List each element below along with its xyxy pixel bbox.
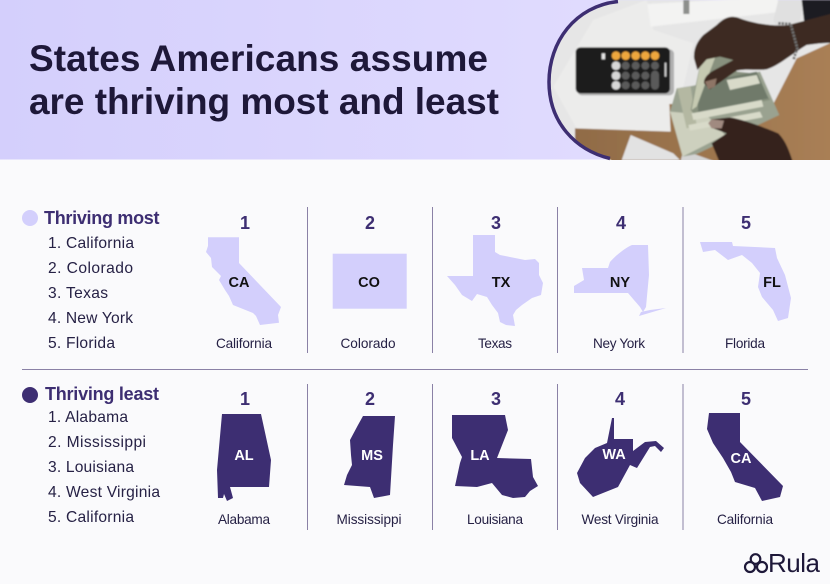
card: least 5 California: CA — [731, 451, 752, 467]
legend dot: dark — [22, 387, 38, 403]
card: most 1 California — [206, 213, 281, 351]
list: top five: 2. Colorado — [48, 260, 133, 277]
heading: thriving most: Thriving most — [44, 208, 160, 228]
card: least 4 West Virginia: 4 — [615, 389, 625, 409]
card: least 4 West Virginia: WA — [602, 447, 626, 463]
list: top five: 4. New York — [48, 310, 133, 327]
card: most 4 New York: Ney York — [593, 336, 645, 351]
photo frame arc — [549, 2, 618, 158]
card: most 3 Texas: Texas — [478, 336, 512, 351]
card: least 3 Louisiana: 3 — [491, 389, 501, 409]
card: least 3 Louisiana — [452, 389, 538, 527]
list: top five: 1. California — [48, 235, 134, 252]
card: most 5 Florida: Florida — [725, 336, 765, 351]
card: most 4 New York — [574, 213, 666, 351]
list: bottom five: 2. Mississippi — [48, 434, 146, 451]
icon: logo loops — [745, 554, 767, 572]
title: States Americans assume — [29, 38, 488, 79]
list: bottom five: 4. West Virginia — [48, 484, 160, 501]
panel: thriving most legend — [22, 208, 160, 352]
list: top five: 5. Florida — [48, 335, 115, 352]
card: most 2 Colorado: 2 — [365, 213, 375, 233]
card: least 2 Mississippi — [336, 389, 402, 527]
card: most 4 New York: 4 — [616, 213, 626, 233]
card: most 1 California: California — [216, 336, 272, 351]
map: Alabama — [217, 414, 271, 501]
card: least 2 Mississippi: Mississippi — [336, 512, 402, 527]
card: least 3 Louisiana: LA — [470, 448, 490, 464]
map: Louisiana — [452, 415, 538, 498]
list: top five: 3. Texas — [48, 285, 108, 302]
list: top five — [48, 235, 134, 352]
card: most 4 New York: NY — [610, 275, 630, 291]
title — [29, 38, 499, 122]
heading: thriving least: Thriving least — [45, 384, 159, 404]
card: least 1 Alabama: 1 — [240, 389, 250, 409]
card: least 3 Louisiana: Louisiana — [467, 512, 523, 527]
map: Mississippi — [344, 416, 395, 498]
card: least 5 California: California — [717, 512, 773, 527]
map: New York — [574, 245, 666, 316]
list: bottom five — [48, 409, 160, 526]
card: least 2 Mississippi: 2 — [365, 389, 375, 409]
card: least 1 Alabama: AL — [234, 448, 254, 464]
map: West Virginia — [577, 418, 664, 497]
card: least 1 Alabama: Alabama — [218, 512, 270, 527]
panel: thriving least legend — [22, 384, 160, 526]
card: most 3 Texas: 3 — [491, 213, 501, 233]
calculator shadow and body — [577, 49, 674, 95]
hands — [694, 13, 830, 89]
bills — [670, 72, 779, 157]
map: Florida — [700, 242, 791, 321]
card: least 5 California — [707, 389, 783, 527]
map: Colorado — [333, 254, 407, 309]
map: Texas — [447, 235, 543, 326]
list: bottom five: 1. Alabama — [48, 409, 128, 426]
map: California — [206, 237, 281, 325]
photo: hands counting money beside a calculator — [540, 0, 830, 163]
list: bottom five: 5. California — [48, 509, 134, 526]
card: least 2 Mississippi: MS — [361, 448, 383, 464]
logo: Rula: Rula — [768, 548, 821, 578]
header banner — [0, 0, 830, 160]
card: most 1 California: CA — [229, 275, 250, 291]
card: most 5 Florida: 5 — [741, 213, 751, 233]
card: most 3 Texas: TX — [492, 275, 511, 291]
card: least 4 West Virginia — [577, 389, 664, 527]
card: most 2 Colorado — [333, 213, 407, 351]
card: most 3 Texas — [447, 213, 543, 351]
card: most 5 Florida: FL — [763, 275, 781, 291]
card: most 1 California: 1 — [240, 213, 250, 233]
map: California — [707, 413, 783, 501]
legend dot: light — [22, 210, 38, 226]
card: least 1 Alabama — [217, 389, 271, 527]
card: least 4 West Virginia: West Virginia — [582, 512, 659, 527]
list: bottom five: 3. Louisiana — [48, 459, 134, 476]
card: most 2 Colorado: CO — [358, 275, 380, 291]
logo: Rula — [745, 548, 821, 578]
title: are thriving most and least — [29, 81, 499, 122]
card: most 5 Florida — [700, 213, 791, 351]
card: most 2 Colorado: Colorado — [340, 336, 396, 351]
card: least 5 California: 5 — [741, 389, 751, 409]
